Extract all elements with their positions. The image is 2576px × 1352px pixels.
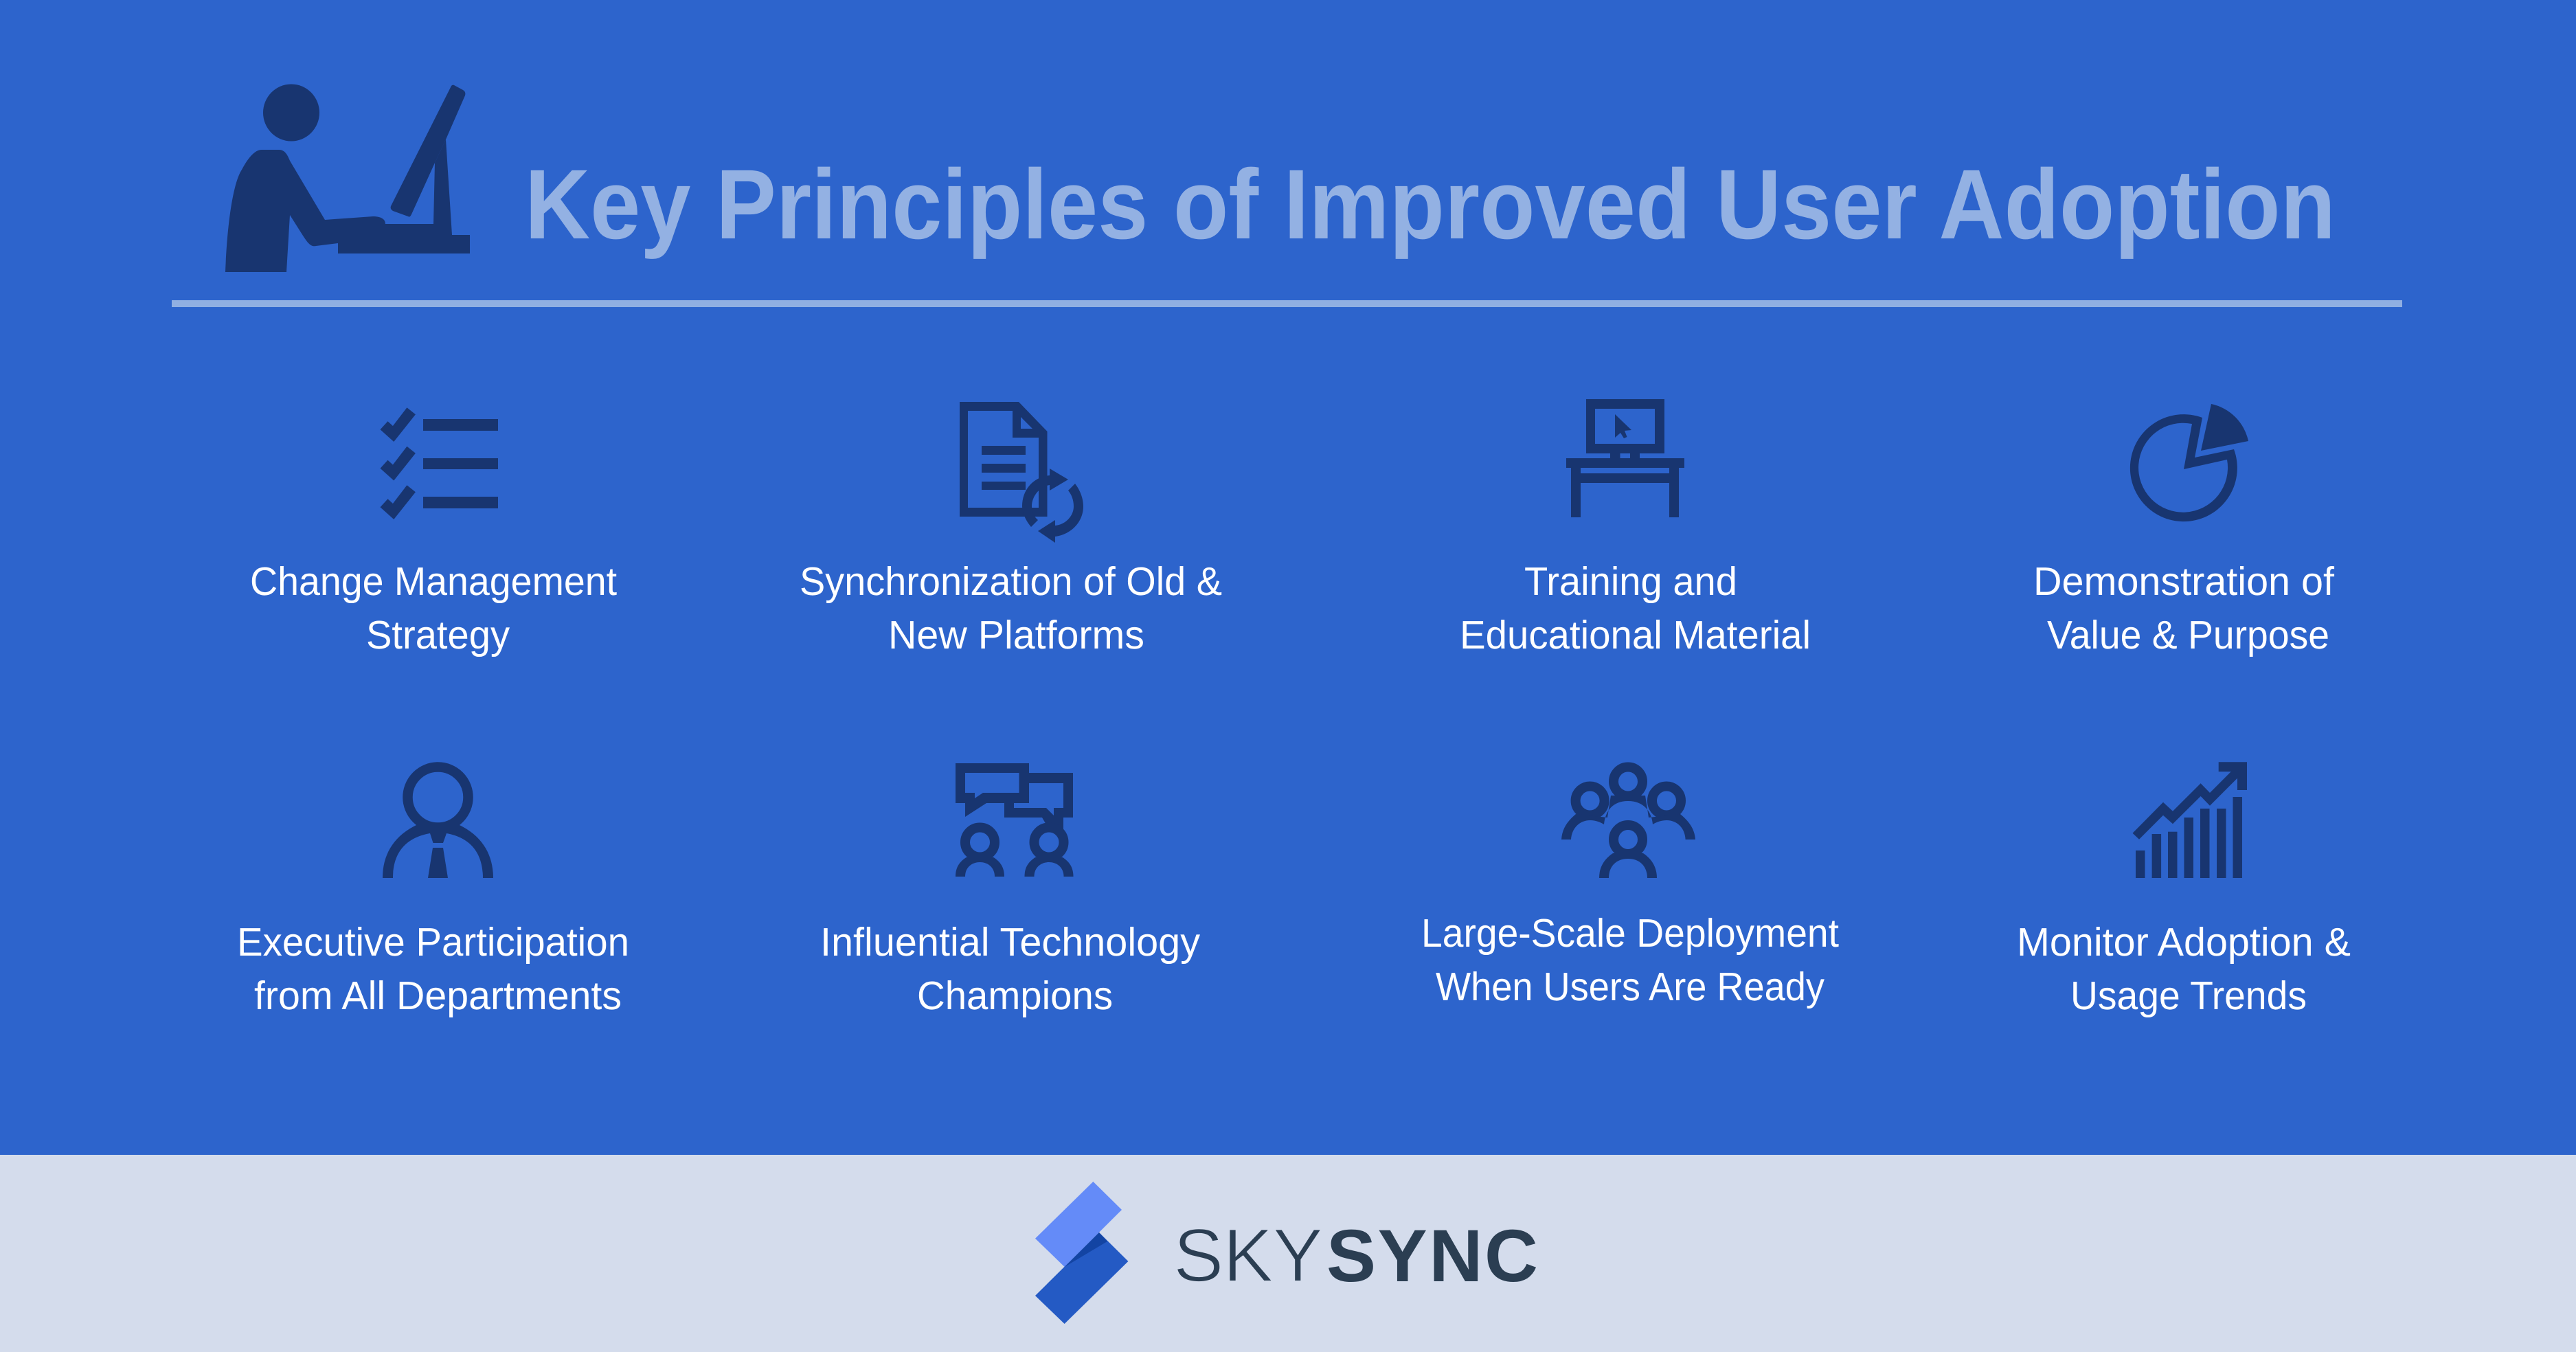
label: Value & Purpose: [2047, 613, 2329, 657]
icon: two people talking: [956, 763, 1073, 877]
label: [1460, 559, 1811, 657]
icon: skysync logo mark: [1035, 1182, 1128, 1324]
label: When Users Are Ready: [1436, 965, 1824, 1009]
principle: monitor adoption: [2017, 762, 2351, 1018]
label: [2033, 559, 2335, 657]
principle: large-scale deployment: [1421, 767, 1839, 1009]
label: Demonstration of: [2033, 559, 2335, 604]
label: [1421, 911, 1839, 1009]
label: Large-Scale Deployment: [1421, 911, 1839, 956]
label: Training and: [1524, 559, 1737, 604]
principle: technology champions: [820, 763, 1200, 1018]
label: Monitor Adoption &: [2017, 920, 2351, 965]
icon: pie chart: [2130, 404, 2248, 521]
label: [2017, 920, 2351, 1018]
title: Key Principles of Improved User Adoption: [525, 149, 2336, 260]
label: [820, 920, 1200, 1018]
principle: value and purpose: [2033, 404, 2335, 657]
principle: executive participation: [237, 767, 629, 1018]
principle: training: [1460, 399, 1811, 657]
icon: checklist: [381, 407, 498, 519]
label: from All Departments: [254, 973, 622, 1018]
principle: synchronization: [800, 402, 1222, 657]
panel: header: [225, 84, 2336, 272]
label: Executive Participation: [237, 920, 629, 965]
label: Influential Technology: [820, 920, 1200, 965]
icon: executive with tie: [383, 767, 493, 878]
label: [237, 920, 629, 1018]
logo wordmark: [1173, 1213, 1538, 1298]
icon: person at computer: [225, 84, 470, 272]
label: Educational Material: [1460, 613, 1811, 657]
label: Synchronization of Old &: [800, 559, 1222, 604]
label: [250, 559, 617, 657]
icon: rising bar chart with arrow: [2132, 762, 2247, 878]
principle: change management strategy: [250, 407, 617, 657]
panel: footer: [0, 1155, 2576, 1352]
logo wordmark: SKY: [1173, 1213, 1323, 1298]
label: Usage Trends: [2070, 973, 2307, 1018]
logo wordmark: SYNC: [1326, 1214, 1538, 1297]
label: Change Management: [250, 559, 617, 604]
label: Strategy: [366, 613, 510, 657]
label: Champions: [917, 973, 1113, 1018]
label: [800, 559, 1222, 657]
icon: document with sync arrows: [960, 402, 1083, 543]
icon: computer on desk: [1566, 399, 1684, 517]
label: New Platforms: [888, 613, 1144, 657]
icon: group of people: [1561, 767, 1695, 878]
